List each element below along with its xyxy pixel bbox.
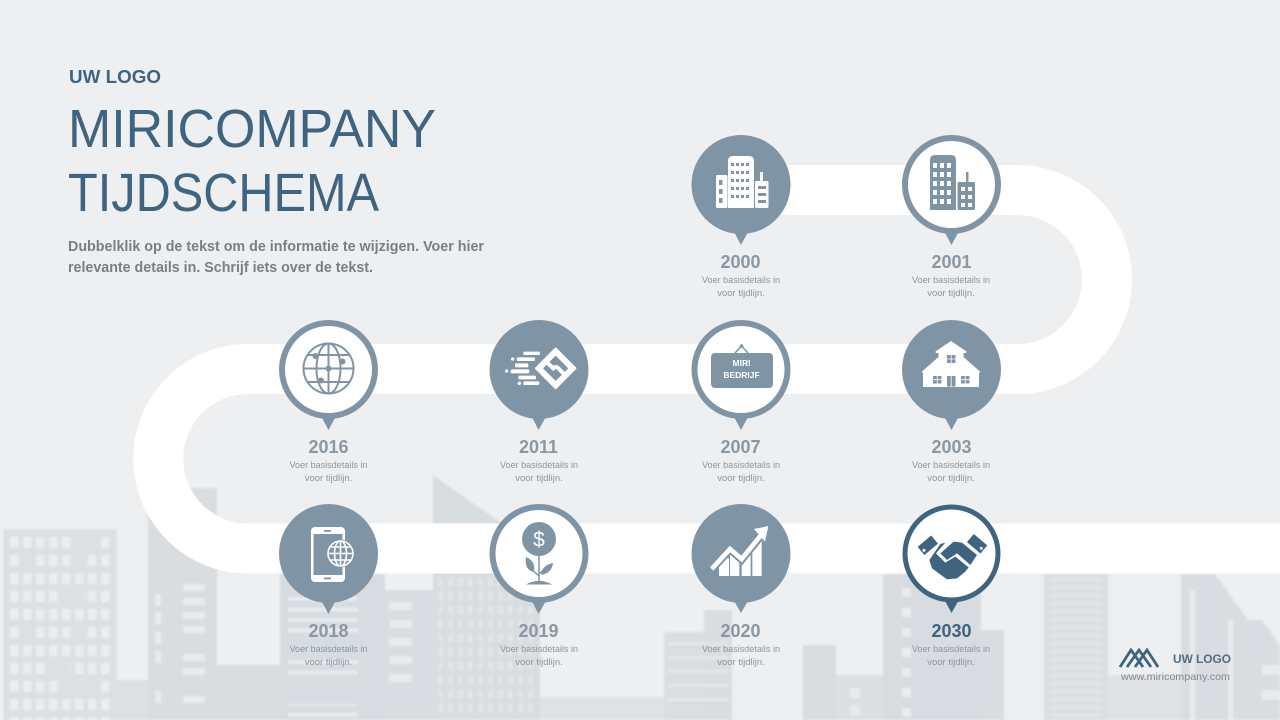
icon: company sign [711, 344, 773, 388]
icon: rising chart [712, 526, 768, 576]
milestone 2011: 2011 [519, 437, 558, 457]
footer logo: www.miricompany.com [1120, 671, 1230, 683]
icon: speeding tag [505, 349, 575, 388]
milestone 2011: Voer basisdetails in [500, 460, 578, 471]
milestone 2020: 2020 [720, 621, 761, 641]
footer logo [1120, 650, 1231, 683]
milestone 2003 [902, 320, 1001, 484]
milestone 2018 [279, 504, 378, 668]
icon: office buildings [716, 156, 768, 208]
milestone 2011 [490, 320, 588, 484]
milestone 2020: voor tijdlijn. [717, 657, 765, 668]
milestone 2001: 2001 [931, 252, 972, 272]
milestone 2020: Voer basisdetails in [702, 644, 780, 655]
intro text [68, 239, 484, 276]
milestone 2030: Voer basisdetails in [912, 644, 990, 655]
milestone 2016 [282, 323, 375, 484]
milestone 2000: voor tijdlijn. [717, 288, 765, 299]
intro text: relevante details in. Schrijf iets over de tekst. [68, 260, 373, 276]
milestone 2019: 2019 [518, 621, 559, 641]
milestone 2003: voor tijdlijn. [927, 473, 975, 484]
milestone 2018: 2018 [308, 621, 349, 641]
icon: company sign: MIRI [733, 358, 750, 368]
milestone 2019: voor tijdlijn. [515, 657, 563, 668]
milestone 2003: 2003 [931, 437, 972, 457]
milestone 2007: Voer basisdetails in [702, 460, 780, 471]
icon: money plant: $ [533, 528, 545, 552]
milestone 2001: voor tijdlijn. [927, 288, 975, 299]
icon: phone with globe [311, 527, 354, 582]
milestone 2016: 2016 [308, 437, 349, 457]
milestone 2011: voor tijdlijn. [515, 473, 563, 484]
icon: house [922, 341, 980, 387]
milestone 2000: 2000 [720, 252, 761, 272]
milestone 2016: Voer basisdetails in [290, 460, 368, 471]
icon: globe [304, 344, 354, 394]
milestone 2007: voor tijdlijn. [717, 473, 765, 484]
milestone 2001 [905, 138, 998, 299]
milestone 2020 [692, 504, 790, 668]
milestone 2018: Voer basisdetails in [290, 644, 368, 655]
milestone 2030 [905, 507, 998, 668]
city skyline [3, 475, 1280, 720]
milestone 2016: voor tijdlijn. [305, 473, 352, 484]
milestone 2007 [694, 323, 788, 484]
milestone 2019 [492, 507, 586, 668]
icon: tower buildings [930, 155, 975, 210]
milestone 2003: Voer basisdetails in [912, 460, 990, 471]
milestone 2018: voor tijdlijn. [305, 657, 352, 668]
small logo heading: UW LOGO [69, 67, 161, 87]
milestone 2000 [692, 135, 790, 299]
icon: money plant [522, 522, 556, 584]
intro text: Dubbelklik op de tekst om de informatie te wijzigen. Voer hier [68, 239, 484, 255]
milestone 2030: voor tijdlijn. [927, 657, 975, 668]
winding road [158, 190, 1280, 548]
icon: mountain logo [1120, 650, 1158, 667]
milestone 2007: 2007 [720, 437, 761, 457]
icon: company sign: BEDRIJF [723, 370, 760, 380]
milestone 2001: Voer basisdetails in [912, 275, 990, 286]
title: TIJDSCHEMA [68, 163, 379, 223]
title: MIRICOMPANY [68, 99, 436, 159]
icon: handshake [918, 534, 987, 579]
milestone 2000: Voer basisdetails in [702, 275, 780, 286]
title [68, 99, 436, 223]
milestone 2030: 2030 [931, 621, 972, 641]
milestone 2019: Voer basisdetails in [500, 644, 578, 655]
footer logo: UW LOGO [1173, 652, 1231, 666]
